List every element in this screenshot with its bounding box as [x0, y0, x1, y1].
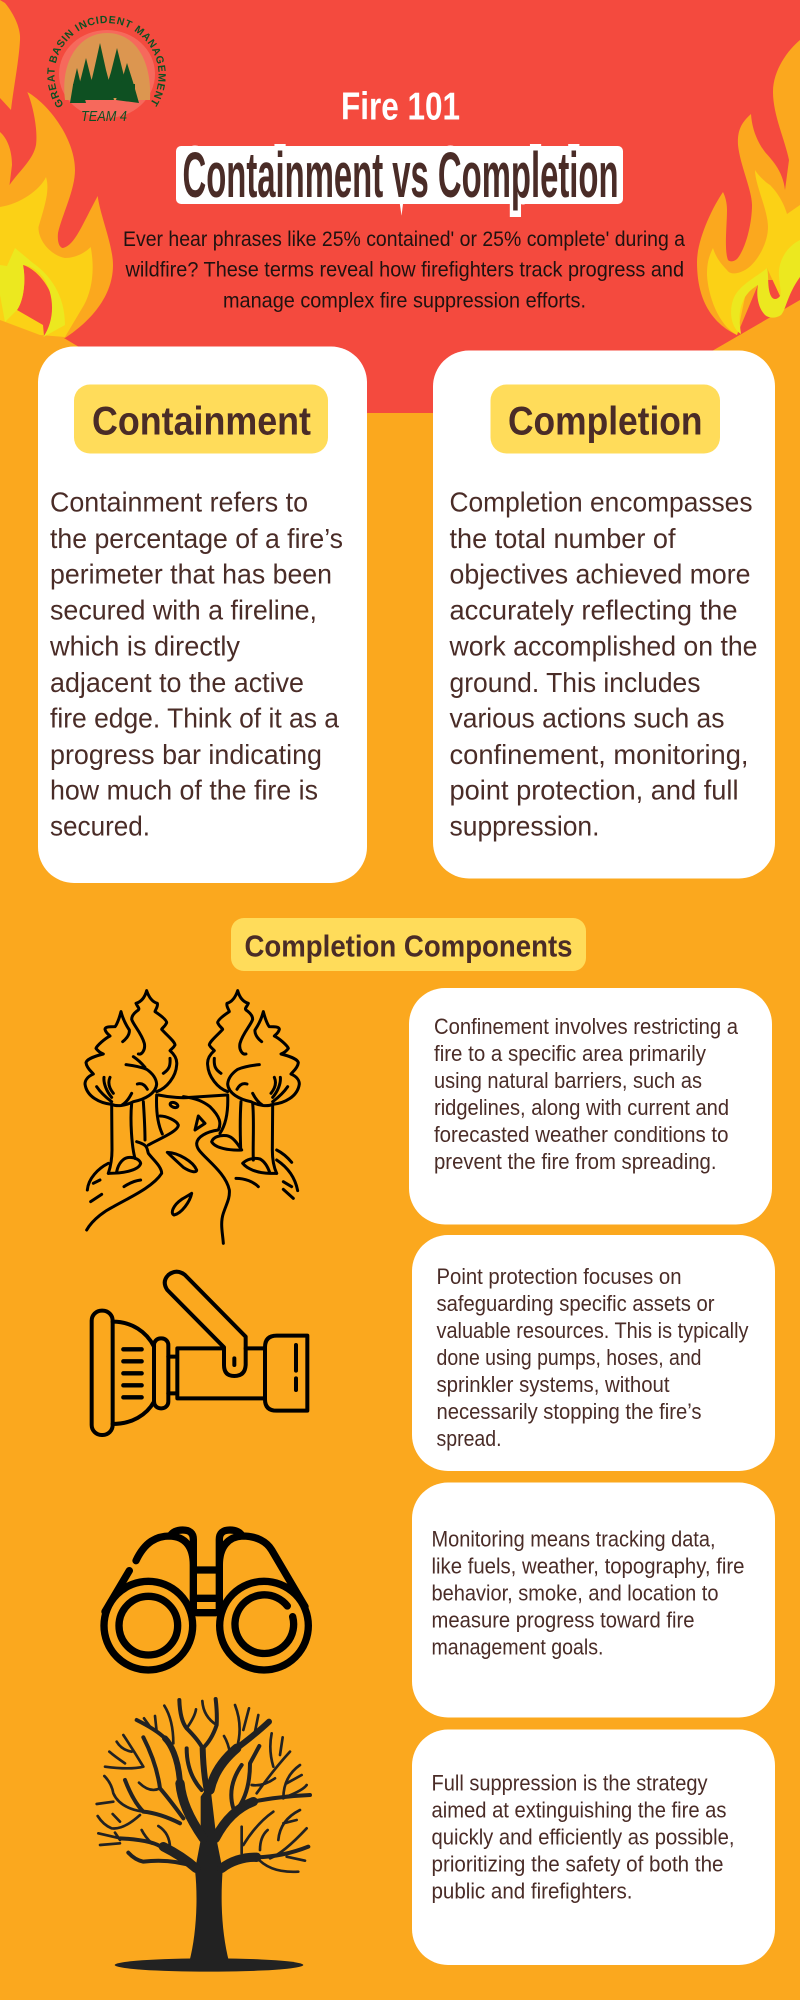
panel: full suppression [412, 1730, 775, 1965]
intro text: manage complex fire suppression efforts. [223, 288, 586, 312]
completion body text: objectives achieved more [450, 558, 750, 590]
left trunks [108, 1095, 162, 1173]
containment body text: perimeter that has been [50, 558, 332, 590]
logo: Great Basin Incident Management Team 4: GREAT BASIN INCIDENT MANAGEMENT [47, 16, 166, 108]
monitoring text: measure progress toward fire [432, 1608, 694, 1632]
monitoring text: management goals. [432, 1634, 604, 1660]
confinement text: Confinement involves restricting a [434, 1014, 739, 1039]
containment body text: the percentage of a fire’s [50, 523, 343, 554]
completion body text: various actions such as [450, 702, 724, 734]
confinement text: prevent the fire from spreading. [434, 1149, 716, 1174]
containment body text: which is directly [49, 630, 240, 662]
confinement text: using natural barriers, such as [434, 1068, 702, 1093]
full suppression text: Full suppression is the strategy [432, 1770, 708, 1796]
point protection text: spread. [436, 1426, 502, 1451]
left front tree [85, 1012, 157, 1106]
containment body text: fire edge. Think of it as a [50, 702, 340, 734]
containment body text: adjacent to the active [50, 667, 304, 698]
red header background [0, 0, 800, 413]
icon: trees and path (confinement) [85, 991, 299, 1243]
confinement text: ridgelines, along with current and [434, 1095, 729, 1120]
full suppression text: public and firefighters. [432, 1878, 632, 1904]
confinement text [434, 1014, 739, 1174]
point protection text [436, 1264, 748, 1451]
completion body text: work accomplished on the [449, 630, 758, 662]
icon: binoculars (monitoring) [104, 1530, 308, 1670]
road edges [87, 1097, 229, 1243]
right flames [697, 40, 800, 335]
point protection text: done using pumps, hoses, and [436, 1345, 702, 1370]
completion body text: suppression. [450, 810, 600, 842]
panel: confinement [409, 988, 772, 1224]
icon: hose nozzle (point protection) [92, 1272, 307, 1435]
panel: point protection [412, 1235, 775, 1471]
monitoring text [432, 1526, 744, 1660]
heading: Containment [74, 384, 328, 454]
heading: Completion: Completion [508, 400, 702, 444]
point protection text: Point protection focuses on [436, 1264, 682, 1289]
icon: bare tree (full suppression) [97, 1699, 310, 1972]
heading: Completion Components [231, 918, 586, 971]
intro text: Ever hear phrases like 25% contained' or 25% complete' during a [123, 227, 685, 251]
panel: containment [38, 346, 367, 883]
completion body text: point protection, and full [450, 774, 738, 806]
containment body text: secured. [50, 810, 150, 842]
monitoring text: like fuels, weather, topography, fire [432, 1554, 744, 1578]
right rear tree [208, 991, 253, 1092]
right front tree [228, 1012, 299, 1106]
heading: Completion [490, 384, 720, 454]
point protection text: valuable resources. This is typically [436, 1318, 748, 1343]
right trunks [220, 1095, 277, 1173]
completion body text: ground. This includes [450, 667, 700, 698]
panel: monitoring [412, 1482, 775, 1718]
completion body text: the total number of [450, 523, 676, 554]
confinement text: fire to a specific area primarily [434, 1041, 706, 1066]
intro text [123, 227, 685, 312]
containment body text [49, 486, 343, 842]
heading: Containment: Containment [92, 400, 311, 444]
heading: Completion Components: Completion Components [244, 928, 572, 964]
containment body text: Containment refers to [50, 486, 308, 518]
left flames [0, 0, 113, 338]
title: Fire 101: Fire 101 [341, 86, 460, 128]
left mound and ground [87, 1157, 141, 1202]
point protection text: necessarily stopping the fire’s [436, 1399, 702, 1424]
intro text: wildfire? These terms reveal how firefighters track progress and [125, 258, 684, 282]
confinement text: forecasted weather conditions to [434, 1122, 728, 1147]
completion body text: Completion encompasses [450, 486, 752, 518]
left rear tree [132, 991, 177, 1092]
point protection text: sprinkler systems, without [436, 1372, 670, 1397]
monitoring text: Monitoring means tracking data, [432, 1526, 716, 1552]
containment body text: how much of the fire is [50, 774, 318, 806]
right mound and ground [212, 1136, 298, 1198]
monitoring text: behavior, smoke, and location to [432, 1580, 718, 1606]
containment body text: secured with a fireline, [50, 594, 317, 626]
completion body text: accurately reflecting the [450, 594, 738, 626]
full suppression text: prioritizing the safety of both the [432, 1852, 724, 1876]
point protection text: safeguarding specific assets or [436, 1291, 714, 1316]
completion body text: confinement, monitoring, [450, 739, 748, 770]
logo: Great Basin Incident Management Team 4: TEAM 4 [81, 108, 127, 125]
completion body text [449, 486, 758, 842]
path spots [169, 1101, 179, 1109]
full suppression text: aimed at extinguishing the fire as [432, 1798, 726, 1822]
containment body text: progress bar indicating [50, 739, 322, 770]
full suppression text [432, 1770, 734, 1904]
panel: completion [433, 350, 775, 878]
full suppression text: quickly and efficiently as possible, [432, 1824, 734, 1850]
